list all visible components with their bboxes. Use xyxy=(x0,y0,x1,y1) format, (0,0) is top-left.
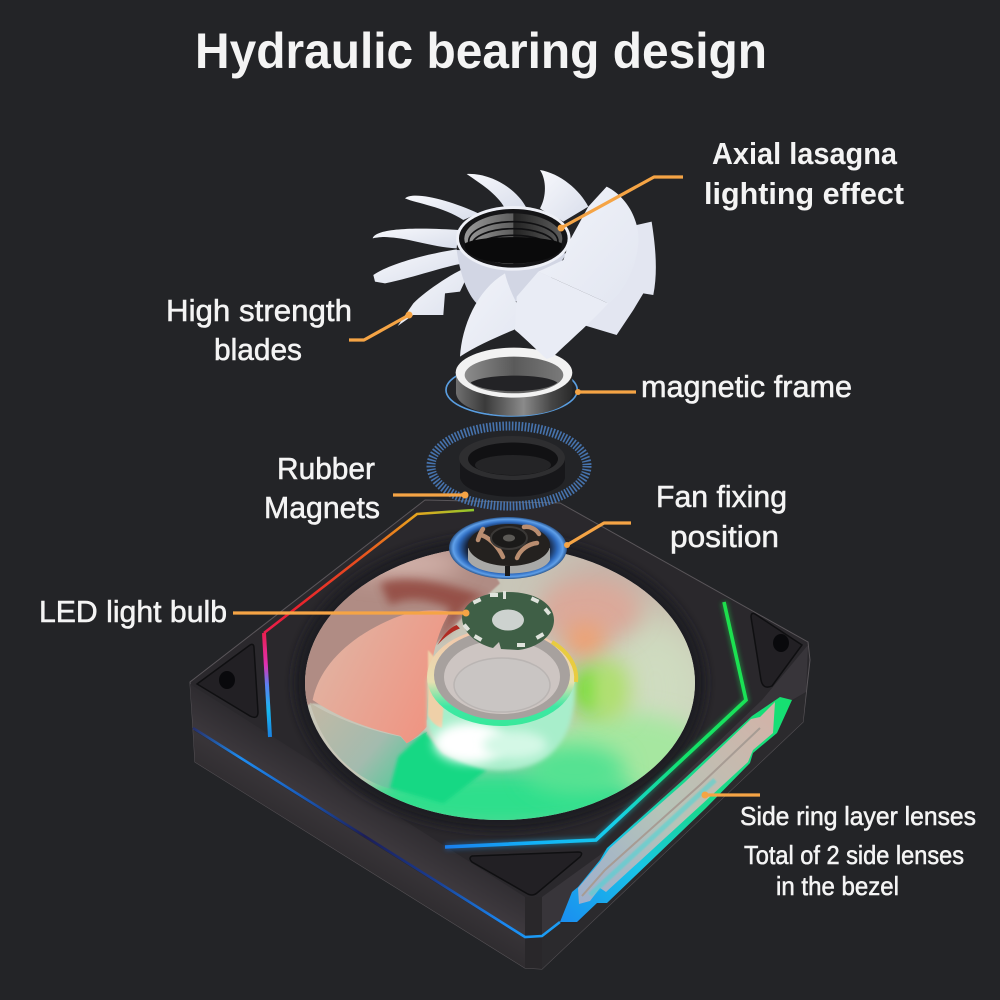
label: fan fixing position xyxy=(656,479,787,554)
label: side ring layer lenses: Side ring layer lenses xyxy=(740,801,976,831)
motor: blue ring xyxy=(449,517,567,579)
hub: top rim xyxy=(427,628,575,726)
frame: below right seam xyxy=(542,692,806,969)
blade: rear dusty pink xyxy=(300,540,500,720)
blade: grey wedge xyxy=(310,703,427,790)
label: rubber magnets: Magnets xyxy=(264,490,380,525)
mount corner: right xyxy=(751,613,802,687)
ring: top face xyxy=(456,348,572,398)
hub: left warm edge xyxy=(428,650,446,728)
label: high strength blades xyxy=(166,293,352,367)
rubber ring top xyxy=(459,436,565,480)
frame: below left seam xyxy=(193,730,525,968)
motor: copper coils xyxy=(478,527,539,558)
motor: metal base xyxy=(468,548,550,574)
hub underside xyxy=(457,250,567,303)
callout line: magnetic frame xyxy=(578,390,636,394)
label: side ring layer lenses: Total of 2 side lenses xyxy=(744,840,964,870)
blade 9 right xyxy=(538,187,638,303)
blade 1 xyxy=(467,174,527,208)
fan opening with RGB blades xyxy=(305,550,695,820)
hub: black lip xyxy=(459,209,568,268)
hub: dark floor xyxy=(465,237,562,263)
blade 10 top xyxy=(540,170,588,222)
blade 8 rear right xyxy=(583,222,656,335)
LED light bulb board xyxy=(462,591,554,650)
label: high strength blades: High strength xyxy=(166,293,352,328)
label: side ring layer lenses: in the bezel xyxy=(776,871,899,901)
hub: collar xyxy=(456,206,571,271)
hub: hot spot xyxy=(434,723,506,763)
lens: inner ridge xyxy=(582,728,760,896)
callout line: LED bulb xyxy=(233,611,466,615)
frame: left bevel band xyxy=(190,684,525,937)
LED strip: left lower xyxy=(264,633,270,737)
motor: dark body xyxy=(468,524,550,566)
motor: bearing core xyxy=(503,534,515,542)
blade: salmon xyxy=(313,610,450,743)
magnetic frame xyxy=(446,348,577,416)
callout line: rubber magnets xyxy=(393,493,465,497)
impeller blades xyxy=(373,170,656,359)
LED strip: left upper xyxy=(264,510,474,633)
blade 3 xyxy=(373,229,458,248)
callout line: fan fixing xyxy=(567,523,631,545)
label: rubber magnets xyxy=(264,451,380,525)
ring: inner wall xyxy=(465,357,563,393)
label: side ring layer lenses xyxy=(740,801,976,901)
lens: inner panel xyxy=(578,702,775,904)
lens: lower highlight xyxy=(590,780,715,895)
blade 6 bottom xyxy=(460,273,528,357)
mount corner: left xyxy=(197,644,258,717)
ring: inner floor xyxy=(471,376,557,391)
rubber magnets xyxy=(431,426,587,506)
LED strip: lower edge xyxy=(193,728,560,937)
motor: centre bearing xyxy=(491,527,527,549)
side lens xyxy=(560,697,792,922)
label: high strength blades: blades xyxy=(214,332,302,367)
dashed blue halo xyxy=(431,426,587,506)
mount corner: bottom xyxy=(470,852,582,895)
blade: dark red shade xyxy=(380,579,487,640)
blade 7 front xyxy=(515,272,608,359)
callout lines xyxy=(233,177,760,795)
screw hole: left xyxy=(219,671,235,689)
callout end dots xyxy=(406,224,708,798)
blade 4 xyxy=(373,249,463,283)
blade 5 xyxy=(398,265,473,326)
motor: base slot xyxy=(505,566,510,576)
frame: silhouette xyxy=(190,500,810,969)
blade 2 xyxy=(405,196,478,220)
hub: thread rings xyxy=(469,222,558,263)
rubber ring floor xyxy=(475,455,551,475)
blade: rear highlight xyxy=(337,550,463,577)
hub: floor ring xyxy=(454,658,550,712)
colour wash xyxy=(358,554,695,820)
label: LED light bulb: LED light bulb xyxy=(39,594,227,629)
frame: dark surround of opening xyxy=(294,535,706,831)
hub: inner floor xyxy=(444,640,560,714)
hub: yellow rim accent xyxy=(552,642,576,682)
callout line: axial lasagna xyxy=(561,177,683,228)
label: fan fixing position: position xyxy=(670,519,779,554)
screw hole: right xyxy=(773,634,789,652)
frame: right bevel band xyxy=(542,645,808,936)
hub cylinder xyxy=(427,628,576,770)
rubber ring body xyxy=(460,458,565,497)
label: axial lasagna lighting effect xyxy=(704,136,904,211)
label: axial lasagna lighting effect: Axial lasagna xyxy=(712,136,898,171)
hub: hot spot tail xyxy=(483,731,547,759)
label: rubber magnets: Rubber xyxy=(277,451,375,486)
hub: inner rim xyxy=(434,630,570,720)
title: Hydraulic bearing design xyxy=(195,23,767,79)
frame: front corner pillar xyxy=(525,897,542,969)
board: centre hole xyxy=(492,610,524,630)
callout line: side lens xyxy=(705,793,760,797)
label: magnetic frame: magnetic frame xyxy=(641,369,852,404)
label: axial lasagna lighting effect: lighting effect xyxy=(704,176,904,211)
blade: green sweep xyxy=(390,732,487,803)
ring: outer wall xyxy=(456,375,572,416)
ring: blue halo xyxy=(446,364,577,416)
label: fan fixing position: Fan fixing xyxy=(656,479,787,514)
blade: bright red crease xyxy=(437,625,460,645)
LED strip: right xyxy=(445,602,746,847)
board: disc xyxy=(462,592,554,650)
callout line: high strength blades xyxy=(349,315,409,340)
blade base xyxy=(300,540,700,830)
rubber ring hole xyxy=(468,442,558,476)
motor stator xyxy=(449,517,567,579)
hub: side glow xyxy=(428,678,575,770)
hub: threaded wall xyxy=(464,213,562,264)
board: LED chips xyxy=(463,591,551,647)
lens: glow outline xyxy=(560,697,792,922)
fan frame xyxy=(190,500,810,969)
